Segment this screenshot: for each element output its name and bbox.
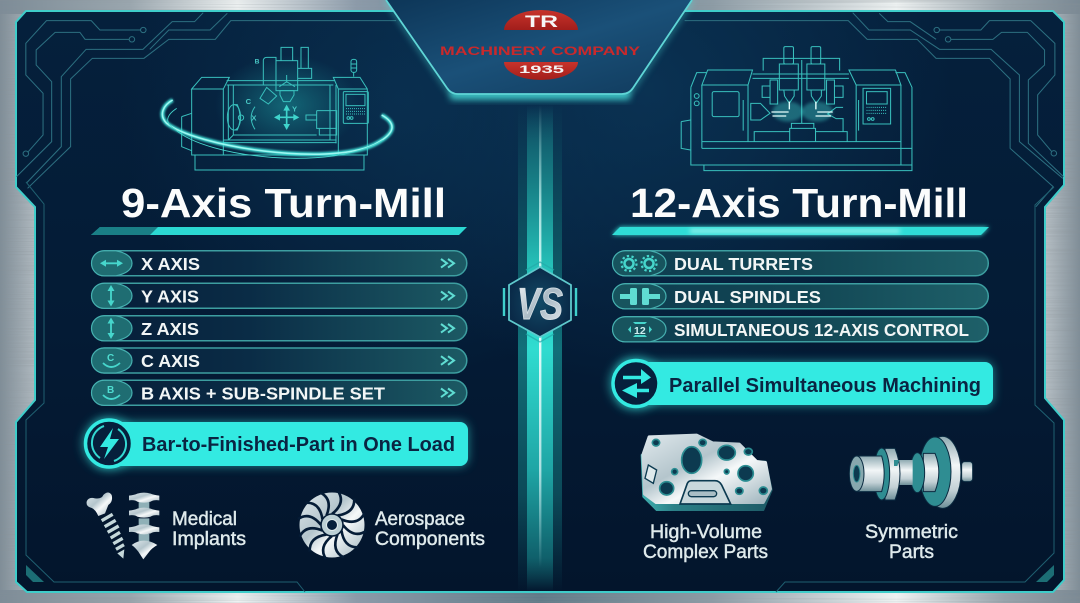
list: 12-axis features (612, 251, 988, 342)
inner frame lines (26, 182, 1054, 592)
row: X axis (92, 251, 467, 276)
item: symmetric parts (849, 436, 973, 563)
icon: swap arrows (613, 360, 659, 406)
icon: 12 axis (628, 322, 652, 337)
icon: 12 axis: 12 (634, 325, 646, 337)
orbit ring (162, 100, 392, 158)
row: Z axis: Z AXIS (141, 319, 199, 339)
callout: parallel simultaneous machining: Parallel Simultaneous Machining (669, 375, 981, 397)
panel: 9-axis machine illustration: B (255, 59, 260, 66)
icon: stepped shaft (849, 436, 973, 508)
logo bottom dome: 1935 (519, 64, 564, 76)
header badge with logo (386, 0, 692, 100)
logo company name: MACHINERY COMPANY (440, 46, 640, 58)
heading underline: 12-axis (612, 227, 989, 235)
icon: turbine (298, 491, 366, 559)
icon: spine vertebrae (129, 493, 159, 559)
icon: bone screw (87, 492, 124, 559)
row: Y axis: Y AXIS (141, 286, 199, 306)
label: symmetric parts: Parts (889, 542, 934, 563)
heading: 9-axis: 9-Axis Turn-Mill (121, 180, 446, 226)
row: B axis + sub-spindle set: B (107, 385, 114, 396)
center divider bar (518, 105, 562, 592)
row: Z axis (92, 316, 467, 341)
icon: machined plate (642, 435, 772, 510)
panel: 12-axis machine illustration (681, 47, 912, 171)
callout: bar-to-finished-part (83, 418, 468, 470)
label: high-volume complex parts: Complex Parts (643, 542, 768, 563)
VS hexagon badge (504, 262, 576, 342)
panel: 9-axis machine illustration: Y (292, 104, 297, 113)
item: aerospace components (298, 491, 485, 559)
row: dual turrets (612, 251, 988, 276)
row: simultaneous 12-axis control (612, 317, 988, 342)
callout: bar-to-finished-part: Bar-to-Finished-Part in One Load (142, 434, 455, 456)
row: X axis: X AXIS (141, 254, 200, 274)
logo top dome: TR (525, 13, 558, 31)
row: C axis: C AXIS (141, 351, 200, 371)
row: B axis + sub-spindle set (92, 380, 467, 405)
panel: 9-axis machine illustration (162, 47, 392, 170)
label: symmetric parts: Symmetric (865, 522, 958, 543)
label: aerospace components: Components (375, 529, 485, 550)
item: high-volume complex parts (642, 435, 772, 563)
icon: gears (622, 256, 656, 271)
row: dual spindles: DUAL SPINDLES (674, 287, 821, 307)
list: 9-axis features (92, 251, 467, 405)
VS hexagon badge: VS (517, 280, 563, 329)
heading underline: 9-axis (91, 227, 467, 235)
logo top dome (504, 10, 578, 31)
item: medical implants (87, 492, 246, 559)
label: medical implants: Implants (172, 529, 246, 550)
icon: lightning bolt (86, 420, 132, 467)
panel: 9-axis machine illustration: X (251, 113, 257, 122)
row: dual turrets: DUAL TURRETS (674, 254, 813, 274)
icon: spindles (620, 288, 660, 305)
row: dual spindles (612, 284, 988, 309)
row: B axis + sub-spindle set: B AXIS + SUB-SPINDLE SET (141, 384, 385, 404)
label: high-volume complex parts: High-Volume (650, 522, 762, 543)
logo bottom dome (504, 62, 578, 80)
row: C axis: C (107, 353, 114, 364)
circuit traces left (17, 13, 396, 188)
circuit traces right (685, 13, 1063, 207)
label: medical implants: Medical (172, 509, 237, 530)
row: Y axis (92, 283, 467, 308)
heading: 12-axis: 12-Axis Turn-Mill (630, 180, 968, 226)
row: C axis (92, 348, 467, 373)
label: aerospace components: Aerospace (375, 509, 465, 530)
row: simultaneous 12-axis control: SIMULTANEOUS 12-AXIS CONTROL (674, 320, 969, 340)
callout: parallel simultaneous machining (610, 358, 993, 410)
panel: 9-axis machine illustration: C (246, 97, 252, 106)
